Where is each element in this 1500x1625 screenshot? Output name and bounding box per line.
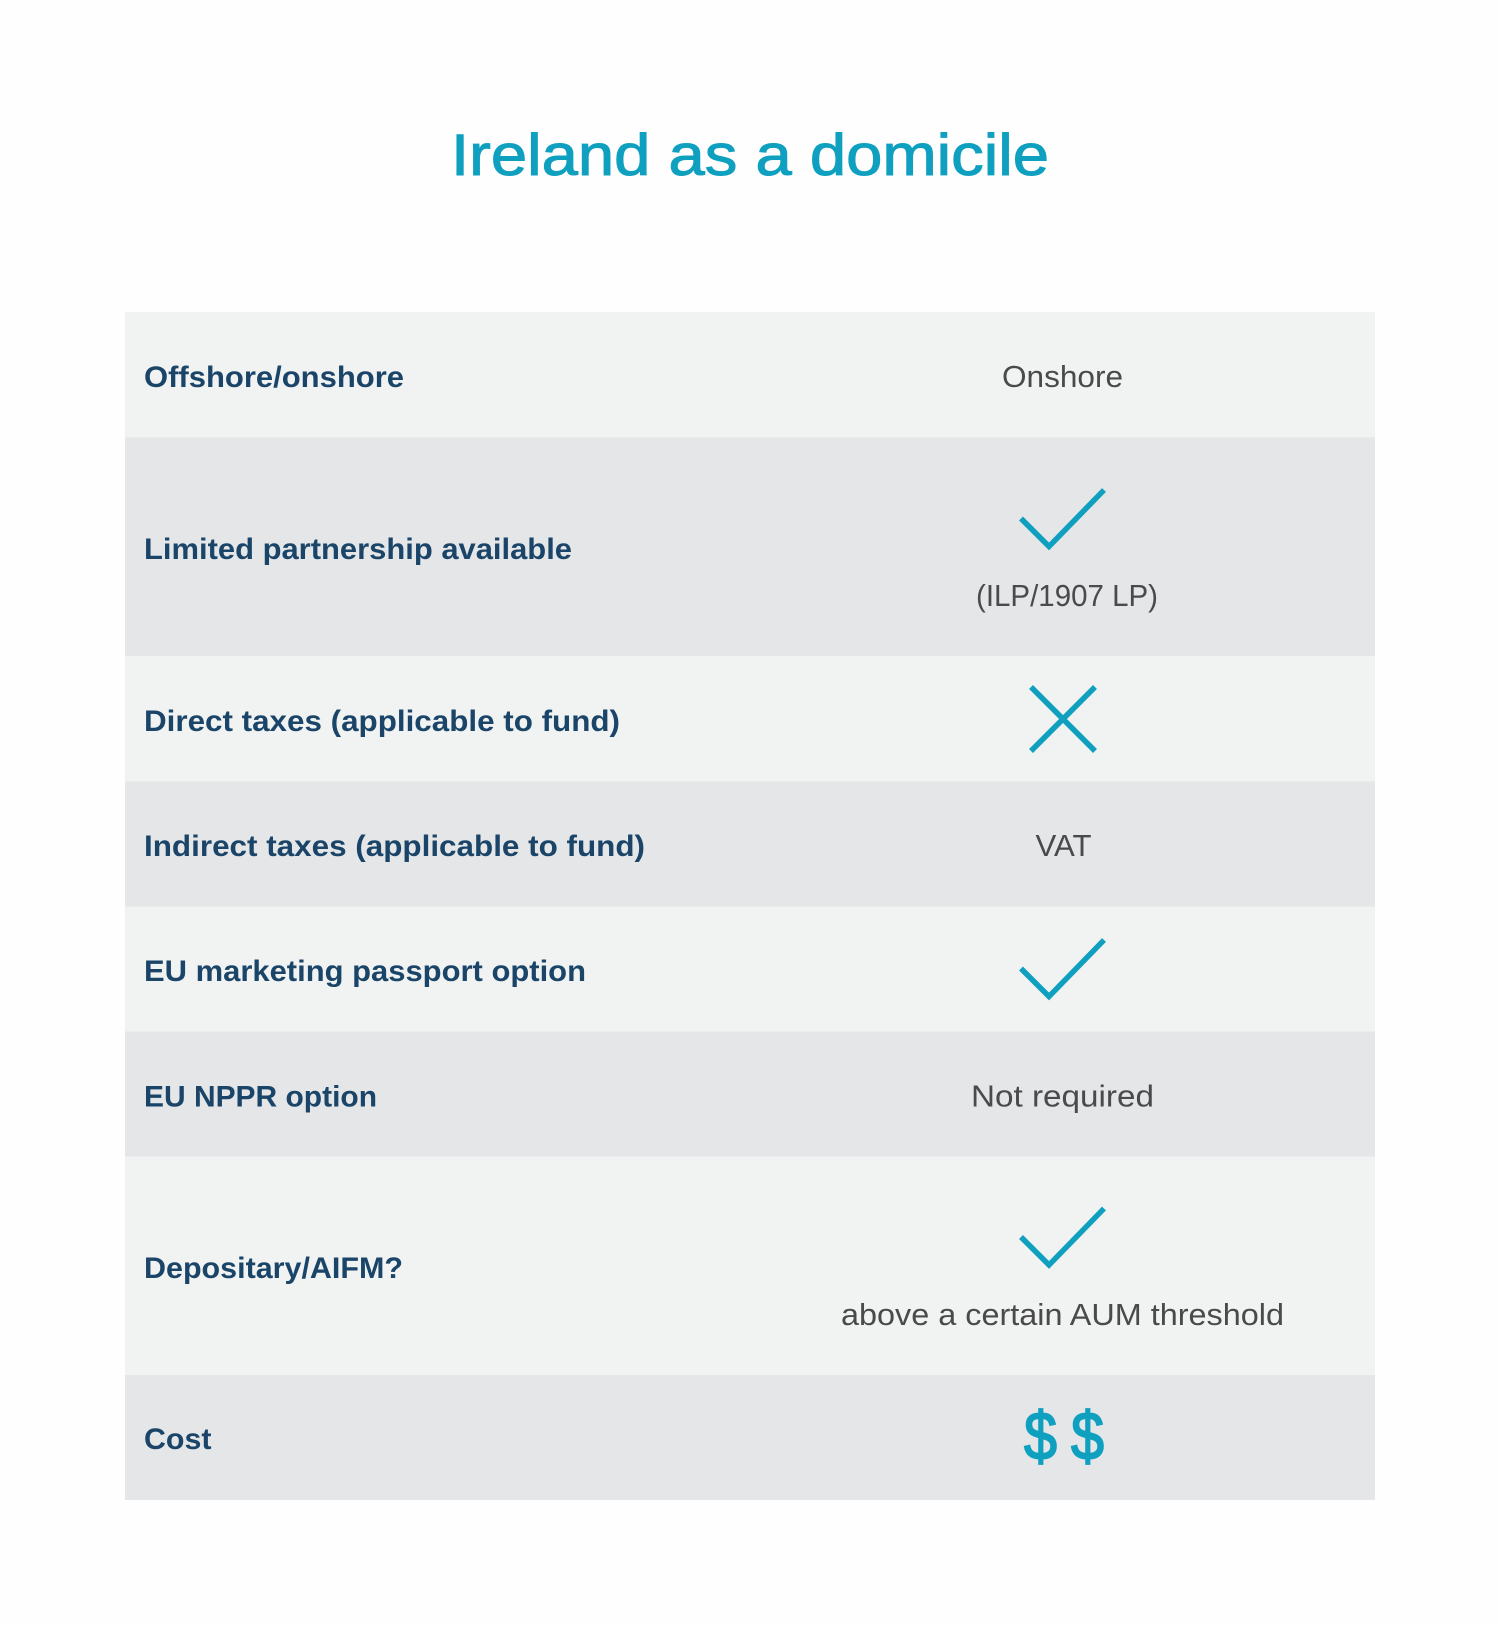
icon: check mark <box>1021 490 1104 546</box>
row: EU marketing passport option: EU marketing passport option <box>144 955 586 988</box>
row: direct taxes <box>125 656 1375 782</box>
row: limited partnership available: (ILP/1907 LP) <box>976 578 1158 613</box>
icon: two dollar signs: $ <box>1071 1398 1104 1474</box>
row: depositary/AIFM: above a certain AUM threshold <box>841 1297 1284 1332</box>
icon: check mark <box>1021 940 1104 996</box>
icon: check mark <box>1021 1208 1104 1265</box>
row: cost <box>125 1375 1375 1500</box>
icon: two dollar signs: $ <box>1024 1398 1057 1474</box>
icon: cross <box>1031 687 1095 751</box>
comparison table <box>125 312 1375 1500</box>
row: EU NPPR option <box>125 1032 1375 1156</box>
row: limited partnership available <box>125 438 1375 656</box>
icon: two dollar signs <box>1024 1398 1104 1474</box>
row: offshore/onshore: Onshore <box>1002 359 1123 394</box>
row: depositary/AIFM: Depositary/AIFM? <box>144 1252 403 1285</box>
row: offshore/onshore: Offshore/onshore <box>144 361 404 394</box>
row: depositary/AIFM <box>125 1156 1375 1375</box>
title: Ireland as a domicile <box>451 123 1049 188</box>
row: EU NPPR option: Not required <box>971 1078 1154 1114</box>
row: cost: Cost <box>144 1423 212 1456</box>
row: EU NPPR option: EU NPPR option <box>144 1080 377 1114</box>
row: limited partnership available: Limited partnership available <box>144 533 572 566</box>
row: indirect taxes: Indirect taxes (applicable to fund) <box>144 830 645 863</box>
row: offshore/onshore <box>125 312 1375 438</box>
row: indirect taxes <box>125 782 1375 906</box>
row: direct taxes: Direct taxes (applicable to fund) <box>144 705 620 738</box>
row: indirect taxes: VAT <box>1036 828 1092 863</box>
row: EU marketing passport option <box>125 906 1375 1032</box>
